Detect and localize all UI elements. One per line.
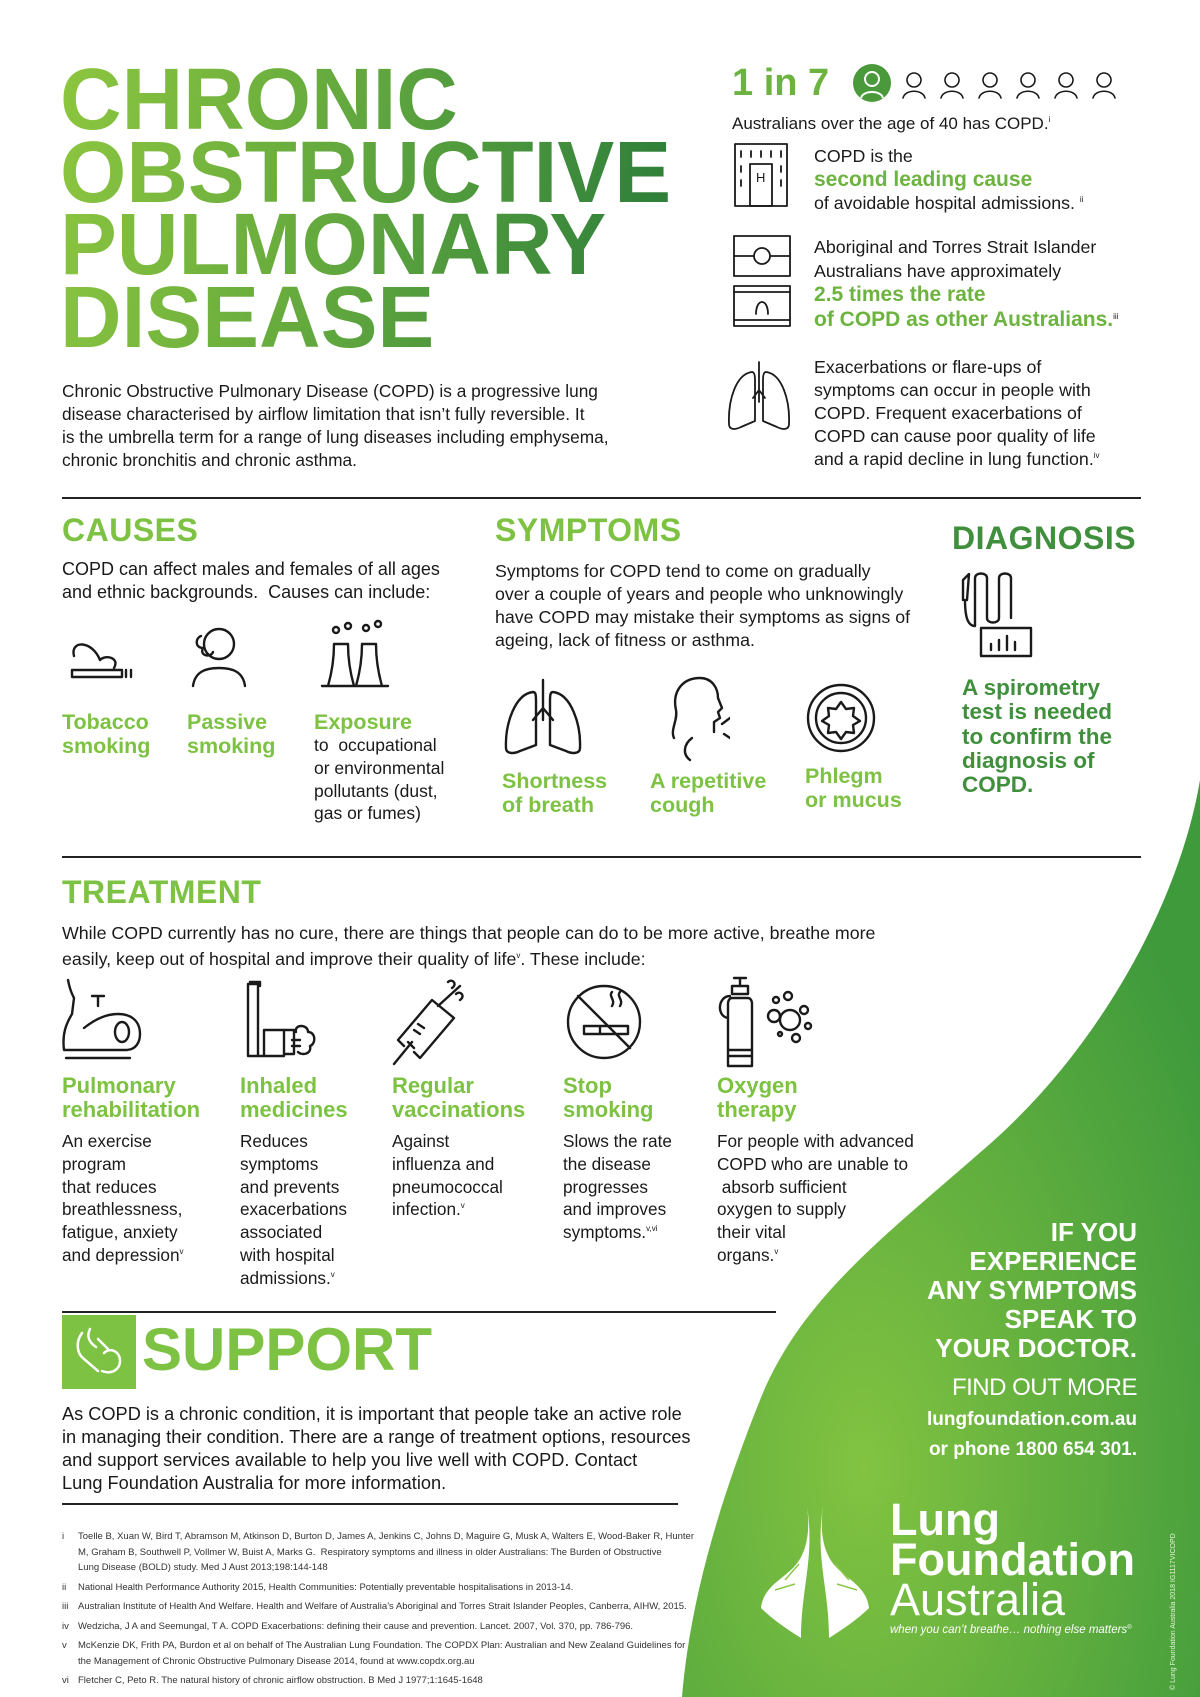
- references: Lung Disease (BOLD) study. Med J Aust 2013;198:144-148: [78, 1562, 328, 1573]
- icon: oxygen tank: [718, 976, 812, 1068]
- panel: treatment: that reduces: [62, 1177, 157, 1197]
- icon: passive smoker: [192, 628, 246, 688]
- references: Toelle B, Xuan W, Bird T, Abramson M, Atkinson D, Burton D, James A, Jenkins C, Johns D, Maguire G, Musk A, Walters E, Wood-Baker R, Hunter: [78, 1531, 694, 1542]
- panel: treatment: Slows the rate: [563, 1131, 672, 1151]
- panel: support: and support services available to help you live well with COPD. Contact: [62, 1450, 637, 1470]
- panel: treatment: Regular: [392, 1073, 474, 1098]
- stat: 1 in 7: 1 in 7: [732, 62, 829, 104]
- panel: symptoms: or mucus: [805, 788, 902, 812]
- panel: treatment: and depressionv: [62, 1245, 184, 1265]
- call to action: [927, 1217, 1137, 1460]
- stat: exacerbations: COPD. Frequent exacerbations of: [814, 403, 1082, 423]
- panel: diagnosis: test is needed: [962, 699, 1112, 724]
- logo: lung foundation australia: Foundation: [890, 1534, 1135, 1585]
- references: i: [62, 1531, 64, 1542]
- references: M, Graham B, Southwell P, Vollmer W, Buist A, Marks G. Respiratory symptoms and illness in older Australians: The Burden of Obstructive: [78, 1546, 662, 1558]
- title: DISEASE: [60, 268, 434, 366]
- icon: hospital: [734, 143, 788, 207]
- stat: hospital: [734, 143, 1083, 213]
- title: CHRONIC: [60, 51, 458, 148]
- panel: treatment: breathlessness,: [62, 1199, 182, 1219]
- icon: flags: [733, 235, 791, 327]
- panel: symptoms: ageing, lack of fitness or asthma.: [495, 630, 755, 650]
- call to action: lungfoundation.com.au: [927, 1409, 1137, 1430]
- panel: symptoms: over a couple of years and people who unknowingly: [495, 584, 903, 604]
- panel: treatment: with hospital: [240, 1245, 335, 1265]
- icon: logo lungs: [761, 1507, 869, 1638]
- panel: symptoms: Symptoms for COPD tend to come on gradually: [495, 561, 871, 581]
- panel: symptoms: [495, 512, 910, 817]
- icon: hospital: H: [756, 170, 765, 185]
- title: [60, 64, 671, 354]
- references: v: [62, 1640, 67, 1651]
- panel: symptoms: Phlegm: [805, 764, 883, 788]
- panel: symptoms: Shortness: [502, 769, 607, 793]
- icon: support hands: [62, 1315, 136, 1389]
- call to action: FIND OUT MORE: [952, 1374, 1137, 1401]
- panel: causes: CAUSES: [62, 512, 198, 548]
- panel: symptoms: A repetitive: [650, 769, 766, 793]
- panel: treatment: Pulmonary: [62, 1073, 176, 1098]
- references: McKenzie DK, Frith PA, Burdon et al on behalf of The Australian Lung Foundation. The COPDX Plan: Australian and New Zealand Guidelines for: [78, 1640, 685, 1651]
- icon: factory: [320, 620, 390, 688]
- title: PULMONARY: [60, 196, 606, 293]
- panel: treatment: While COPD currently has no cure, there are things that people can do to be more active, breathe more: [62, 923, 875, 943]
- intro paragraph: [62, 381, 609, 470]
- intro paragraph: disease characterised by airflow limitation that isn’t fully reversible. It: [62, 404, 584, 424]
- panel: causes: and ethnic backgrounds. Causes can include:: [62, 582, 430, 602]
- panel: treatment: infection.v: [392, 1199, 465, 1219]
- panel: causes: Exposure: [314, 710, 412, 734]
- panel: symptoms: of breath: [502, 793, 594, 817]
- logo: lung foundation australia: Lung: [890, 1494, 1000, 1545]
- panel: treatment: symptoms: [240, 1154, 318, 1174]
- panel: treatment: the disease: [563, 1154, 651, 1174]
- panel: causes: smoking: [62, 734, 150, 758]
- stat: hospital: COPD is the: [814, 146, 913, 166]
- panel: treatment: and prevents: [240, 1177, 339, 1197]
- panel: treatment: fatigue, anxiety: [62, 1222, 178, 1242]
- panel: treatment: Stop: [563, 1073, 612, 1098]
- panel: symptoms: cough: [650, 793, 714, 817]
- panel: causes: COPD can affect males and females of all ages: [62, 559, 440, 579]
- panel: diagnosis: DIAGNOSIS: [952, 520, 1136, 556]
- panel: treatment: [62, 874, 914, 1288]
- intro paragraph: Chronic Obstructive Pulmonary Disease (COPD) is a progressive lung: [62, 381, 598, 401]
- icon: phlegm: [806, 684, 876, 752]
- references: the Management of Chronic Obstructive Pulmonary Disease 2014, found at www.copdx.org.au: [78, 1656, 475, 1666]
- references: Wedzicha, J A and Seemungal, T A. COPD Exacerbations: defining their cause and prevention. Lancet. 2007, Vol. 370, pp. 786-796.: [78, 1620, 633, 1632]
- panel: treatment: Against: [392, 1131, 449, 1151]
- references: vi: [62, 1675, 69, 1686]
- logo: lung foundation australia: when you can’t breathe… nothing else matters®: [890, 1624, 1132, 1636]
- call to action: or phone 1800 654 301.: [929, 1439, 1137, 1460]
- stat: 1 in 7: [732, 62, 1116, 133]
- panel: causes: to occupational: [314, 735, 437, 755]
- panel: causes: pollutants (dust,: [314, 781, 438, 801]
- logo: lung foundation australia: [761, 1494, 1135, 1638]
- references: Australian Institute of Health And Welfare. Health and Welfare of Australia’s Aboriginal and Torres Strait Islander Peoples, Canberra, AIHW, 2015.: [78, 1601, 687, 1612]
- stat: hospital: second leading cause: [814, 168, 1032, 191]
- panel: treatment: and improves: [563, 1199, 666, 1219]
- icon: lungs: [504, 678, 582, 754]
- panel: diagnosis: diagnosis of: [962, 748, 1095, 773]
- stat: aboriginal: Aboriginal and Torres Strait Islander: [814, 237, 1096, 257]
- panel: treatment: pneumococcal: [392, 1177, 503, 1197]
- panel: treatment: exacerbations: [240, 1199, 347, 1219]
- panel: diagnosis: A spirometry: [962, 675, 1100, 700]
- stat: exacerbations: [728, 357, 1100, 469]
- stat: aboriginal: Australians have approximately: [814, 260, 1061, 280]
- intro paragraph: chronic bronchitis and chronic asthma.: [62, 450, 357, 470]
- stat: aboriginal: 2.5 times the rate: [814, 283, 986, 306]
- references: iii: [62, 1601, 68, 1612]
- panel: treatment: progresses: [563, 1177, 648, 1197]
- panel: causes: Tobacco: [62, 710, 149, 734]
- panel: treatment: easily, keep out of hospital and improve their quality of lifev. These include:: [62, 949, 646, 969]
- panel: treatment: therapy: [717, 1097, 796, 1122]
- panel: treatment: Reduces: [240, 1131, 308, 1151]
- panel: causes: or environmental: [314, 758, 444, 778]
- stat: exacerbations: symptoms can occur in people with: [814, 380, 1091, 400]
- panel: support: Lung Foundation Australia for more information.: [62, 1473, 446, 1493]
- panel: symptoms: SYMPTOMS: [495, 512, 682, 548]
- panel: causes: [62, 512, 444, 823]
- panel: treatment: program: [62, 1154, 126, 1174]
- panel: treatment: For people with advanced: [717, 1131, 914, 1151]
- icon: cough: [672, 676, 730, 762]
- logo: lung foundation australia: Australia: [890, 1574, 1065, 1625]
- panel: treatment: admissions.v: [240, 1268, 335, 1288]
- references: iv: [62, 1620, 69, 1632]
- icon: syringe: [392, 980, 464, 1066]
- panel: causes: smoking: [187, 734, 275, 758]
- intro paragraph: is the umbrella term for a range of lung diseases including emphysema,: [62, 427, 609, 447]
- call to action: SPEAK TO: [1005, 1304, 1137, 1334]
- stat: exacerbations: and a rapid decline in lung function.iv: [814, 449, 1100, 469]
- title: OBSTRUCTIVE: [60, 124, 671, 220]
- stat: exacerbations: Exacerbations or flare-ups of: [814, 357, 1041, 377]
- panel: diagnosis: to confirm the: [962, 724, 1112, 749]
- panel: treatment: TREATMENT: [62, 874, 261, 910]
- panel: treatment: their vital: [717, 1222, 786, 1242]
- copyright vertical: © Lung Foundation Australia 2018 IG1117VICOPD: [1170, 1533, 1177, 1690]
- panel: treatment: influenza and: [392, 1154, 494, 1174]
- icon: lungs: [728, 361, 790, 430]
- panel: treatment: Inhaled: [240, 1073, 317, 1098]
- panel: treatment: absorb sufficient: [722, 1177, 847, 1197]
- panel: treatment: Oxygen: [717, 1073, 798, 1098]
- panel: treatment: medicines: [240, 1097, 348, 1122]
- panel: causes: Passive: [187, 710, 267, 734]
- references: National Health Performance Authority 2015, Health Communities: Potentially preventable hospitalisations in 2013-14.: [78, 1582, 573, 1592]
- icon: inhaler: [246, 980, 316, 1058]
- call to action: ANY SYMPTOMS: [927, 1275, 1137, 1305]
- panel: treatment: associated: [240, 1222, 322, 1242]
- stat: aboriginal: [733, 235, 1118, 330]
- panel: support: As COPD is a chronic condition, it is important that people take an active role: [62, 1404, 682, 1424]
- panel: causes: gas or fumes): [314, 803, 421, 823]
- icon: cigarette: [70, 643, 132, 678]
- panel: symptoms: have COPD may mistake their symptoms as signs of: [495, 607, 910, 627]
- panel: support: [62, 1315, 691, 1493]
- panel: treatment: vaccinations: [392, 1097, 525, 1122]
- stat: exacerbations: COPD can cause poor quality of life: [814, 426, 1096, 446]
- panel: treatment: organs.v: [717, 1245, 778, 1265]
- icon: no smoking: [566, 984, 642, 1060]
- stat: aboriginal: of COPD as other Australians.iii: [814, 308, 1118, 330]
- panel: diagnosis: COPD.: [962, 772, 1033, 797]
- panel: treatment: COPD who are unable to: [717, 1154, 908, 1174]
- call to action: IF YOU: [1051, 1217, 1137, 1247]
- references: ii: [62, 1582, 66, 1592]
- call to action: YOUR DOCTOR.: [935, 1333, 1137, 1363]
- panel: treatment: symptoms.v,vi: [563, 1222, 658, 1242]
- panel: treatment: rehabilitation: [62, 1097, 200, 1122]
- stat: hospital: of avoidable hospital admissions. ii: [814, 193, 1083, 213]
- references: [62, 1531, 694, 1686]
- panel: support: SUPPORT: [142, 1316, 432, 1383]
- panel: treatment: oxygen to supply: [717, 1199, 846, 1219]
- panel: diagnosis: [952, 520, 1136, 797]
- panel: treatment: An exercise: [62, 1131, 152, 1151]
- icon: spirometer: [962, 572, 1032, 658]
- icon: exercise bike: [62, 978, 142, 1060]
- panel: treatment: smoking: [563, 1097, 653, 1122]
- panel: support: in managing their condition. There are a range of treatment options, resources: [62, 1427, 691, 1447]
- call to action: EXPERIENCE: [969, 1246, 1137, 1276]
- references: Fletcher C, Peto R. The natural history of chronic airflow obstruction. B Med J 1977;1:1645-1648: [78, 1675, 483, 1686]
- stat: 1 in 7: Australians over the age of 40 has COPD.i: [732, 114, 1050, 133]
